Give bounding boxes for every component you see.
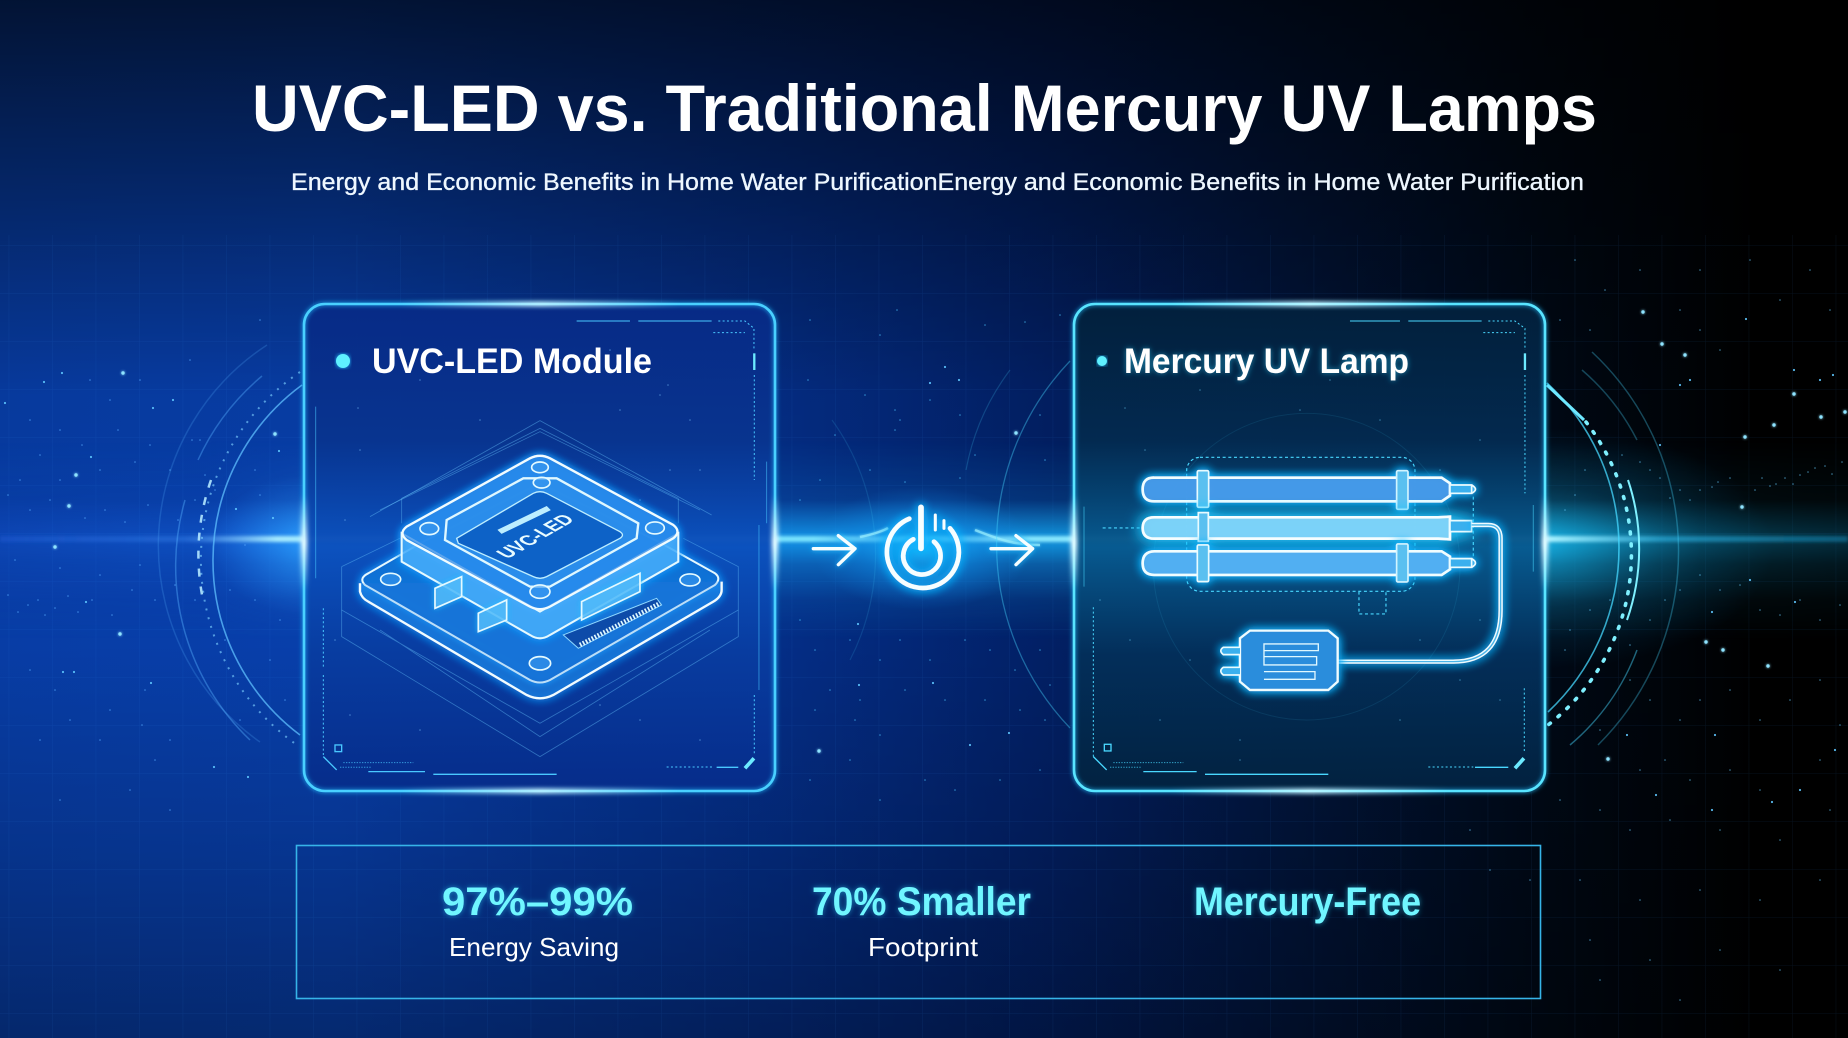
upper module block [402, 456, 678, 638]
background concentric arcs, right [832, 352, 1679, 745]
plug body [1221, 631, 1338, 690]
ghost outlines [342, 421, 738, 757]
icon: flow arrow in [813, 536, 855, 565]
background concentric arcs, left [158, 345, 302, 745]
panel: Mercury UV lamp [1071, 302, 1548, 793]
metric: energy saving [442, 880, 633, 962]
HUD frame details [316, 321, 767, 774]
stars, small [1470, 260, 1842, 1000]
icon: power symbol [887, 507, 959, 588]
icon: isometric UVC-LED module [342, 421, 738, 757]
metric: mercury-free: Mercury-Free [1194, 880, 1421, 924]
pin strip [563, 598, 662, 648]
chip label: UVC-LED [492, 511, 580, 562]
dashed enclosure [1103, 457, 1473, 614]
panel: UVC-LED module [301, 302, 778, 793]
tube 1 [1143, 471, 1475, 509]
icon: flow arrow out [991, 536, 1033, 565]
power cable [1338, 525, 1501, 662]
metric: footprint: 70% Smaller [812, 880, 1031, 924]
tube 3 [1143, 544, 1475, 582]
base plate [360, 483, 722, 698]
panel heading: UVC-LED Module: UVC-LED Module [372, 342, 652, 381]
mounting holes [381, 462, 700, 670]
HUD frame details [1084, 321, 1533, 774]
panel heading: Mercury UV Lamp: Mercury UV Lamp [1124, 342, 1409, 381]
title: UVC-LED vs. Traditional Mercury UV Lamps [252, 71, 1597, 145]
subtitle: Energy and Economic Benefits in Home Water PurificationEnergy and Economic Benefits in Home Water Purification [291, 169, 1584, 196]
stars, bright [55, 312, 1845, 759]
connector tabs [435, 573, 640, 632]
metric: energy saving: 97%–99% [442, 880, 633, 924]
tube 2 [1143, 513, 1472, 541]
panel: key metrics [296, 846, 1540, 998]
metric: energy saving: Energy Saving [449, 932, 619, 962]
metric: footprint [812, 880, 1031, 962]
icon: mercury lamp tubes with ballast and plug [1103, 457, 1501, 690]
metric: footprint: Footprint [868, 932, 979, 962]
